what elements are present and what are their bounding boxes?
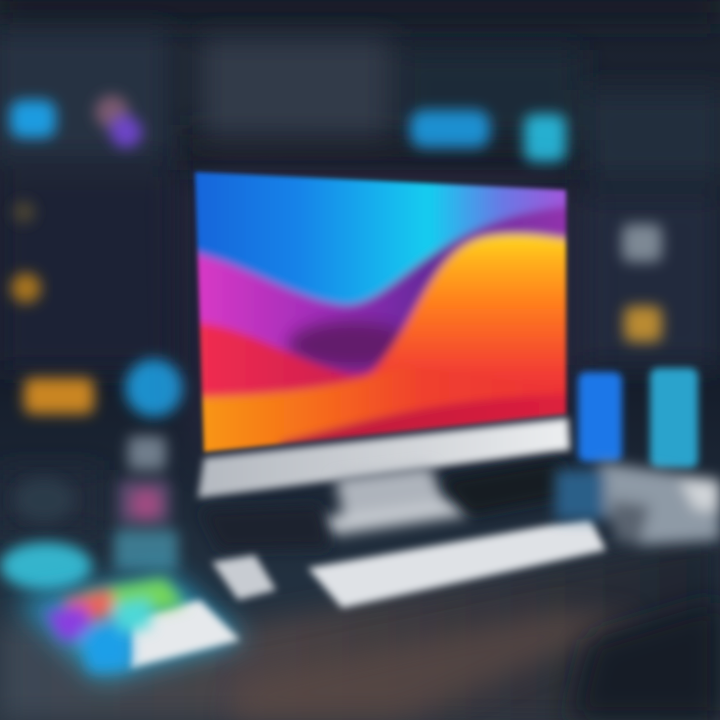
blue box [578, 372, 622, 462]
palette: violet [45, 605, 95, 640]
screen: crimson lower edge [277, 394, 566, 445]
screen: magenta wave [194, 203, 568, 382]
icon: blue circle by monitor [125, 359, 183, 417]
screen: orange base wave [199, 368, 492, 455]
icon: blue pill top centre [410, 110, 490, 148]
icon: blue rounded badge upper left [10, 100, 56, 138]
icon: amber button left [24, 378, 94, 414]
colour palette tablet [15, 575, 245, 680]
monitor screen with colourful waves [192, 168, 570, 456]
palette: orange red [62, 588, 120, 625]
icon: amber square right [624, 306, 662, 342]
icon: teal badge top right [524, 114, 566, 162]
screen: red wave [196, 318, 374, 406]
mouse [212, 555, 276, 600]
teal cup left [0, 542, 92, 590]
screen: blue sky layer [192, 168, 570, 313]
tablet white half [130, 600, 240, 668]
bottles left of monitor [114, 436, 178, 570]
dashboard panels in background [0, 30, 720, 530]
dark corner right bottom [570, 600, 720, 720]
monitor bezel chin [198, 418, 570, 498]
icon: amber dots left [11, 201, 41, 303]
monitor stand [320, 466, 470, 535]
desk surface [0, 535, 720, 720]
teal box [650, 368, 698, 468]
top dark band [0, 0, 720, 170]
screen: yellow orange wave [368, 225, 570, 392]
tablet shadow glow [15, 575, 245, 680]
palette: blue [80, 620, 130, 672]
right side blue boxes [578, 368, 698, 468]
desk wood reflection [230, 610, 640, 720]
grey circle left [14, 478, 74, 522]
palette: cyan [110, 598, 150, 632]
icon: grey square right [622, 224, 662, 262]
right side gadgets [555, 462, 720, 545]
keyboard [308, 518, 606, 608]
palette: green [85, 578, 185, 620]
icon: purple and orange swirl [95, 95, 142, 148]
monitor glow [195, 172, 566, 452]
dark desk shadows [200, 460, 575, 550]
screen: dark purple fold [288, 321, 412, 369]
